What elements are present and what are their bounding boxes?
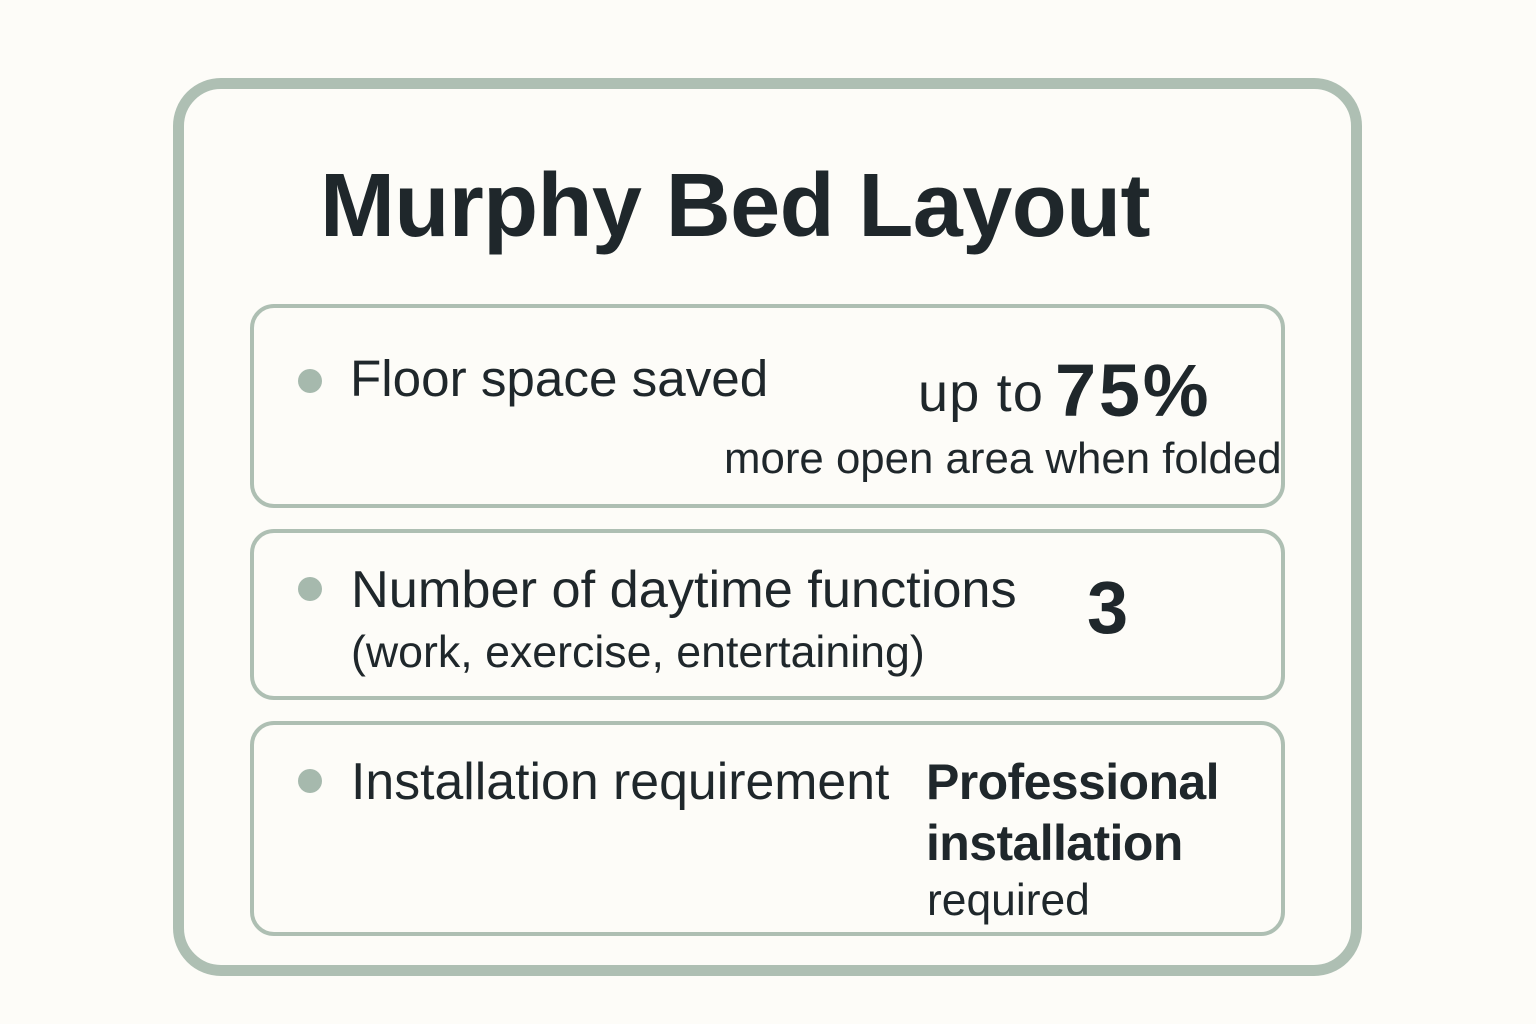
value: 75% [1055,349,1211,432]
panel: outer card [173,78,1362,976]
label: Floor space saved [350,350,768,407]
bullet [298,369,322,393]
label: Installation requirement [351,752,889,810]
panel: floor space saved [250,304,1285,508]
value: 3 [1087,566,1128,649]
sub label: (work, exercise, entertaining) [351,628,925,677]
value: installation [926,815,1183,871]
bullet [298,577,322,601]
label: Number of daytime functions [351,561,1017,619]
panel: installation requirement [250,721,1285,936]
value prefix: up to [918,363,1044,423]
value note: required [927,876,1090,925]
value: Professional [926,754,1219,810]
bullet [298,769,322,793]
value [926,754,1219,871]
title: Murphy Bed Layout [320,156,1150,256]
value note: more open area when folded [724,434,1282,483]
panel: daytime functions [250,529,1285,700]
